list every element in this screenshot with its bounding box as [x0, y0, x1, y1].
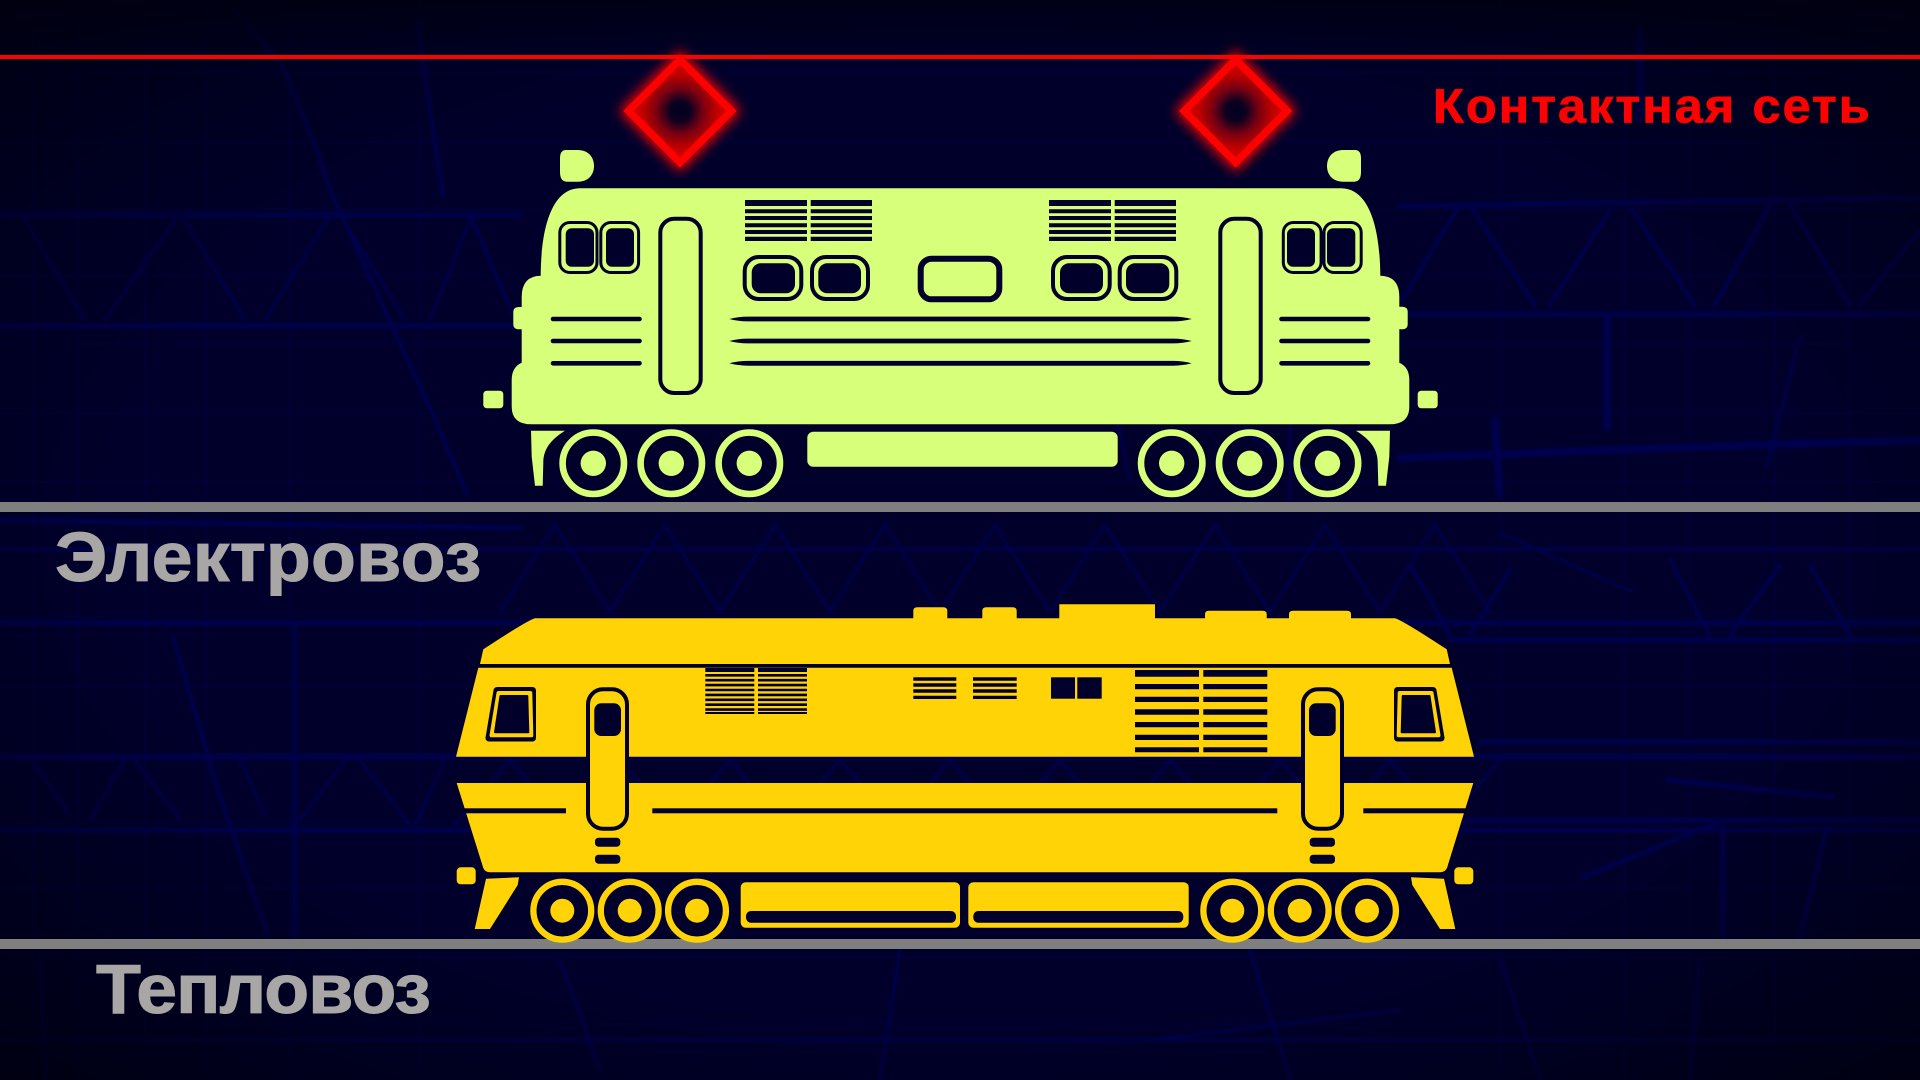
- diesel loco: left buffer: [457, 867, 476, 884]
- electric loco: right roof pad: [1327, 150, 1361, 182]
- electric loco: left vent: [745, 200, 872, 241]
- electric locomotive: [483, 150, 1438, 494]
- label: contact network: Контактная сеть: [1433, 80, 1870, 133]
- electric loco: underframe tank: [807, 432, 1118, 467]
- electric loco: doors: [660, 219, 1261, 393]
- electric loco: left buffer: [483, 391, 503, 408]
- electric loco: long side grilles: [729, 317, 1192, 366]
- diesel loco: left skirt: [475, 877, 519, 929]
- diesel loco: middle body: [456, 668, 1474, 757]
- rail under diesel locomotive: [0, 939, 1920, 949]
- diesel loco: right cab window: [1398, 690, 1441, 738]
- diesel loco: roof and upper body: [480, 604, 1450, 664]
- diesel loco: side trim lines: [460, 808, 1469, 813]
- electric loco: side windows: [745, 257, 1176, 299]
- overhead contact wire glow and pantograph diamonds: [629, 60, 1287, 162]
- diesel loco: large radiator vent: [1135, 670, 1267, 752]
- label: electric locomotive: Электровоз: [55, 519, 481, 597]
- diesel loco: doors: [588, 689, 1342, 829]
- label: diesel locomotive: Тепловоз: [96, 951, 431, 1029]
- electric loco: left roof pad: [560, 150, 594, 182]
- electric loco: left cab windows: [560, 222, 639, 272]
- diesel loco: left cab window: [489, 690, 532, 738]
- diesel loco: small vents: [913, 677, 1017, 699]
- electric loco: right cab windows: [1283, 222, 1361, 272]
- pantograph: right diamond: [1184, 60, 1287, 162]
- diesel loco: right skirt: [1411, 877, 1455, 929]
- rail under electric locomotive: [0, 502, 1920, 512]
- diesel locomotive: [456, 604, 1474, 940]
- electric loco: right vent: [1049, 200, 1176, 241]
- diesel loco: left wheels: [533, 882, 726, 940]
- contact wire: [0, 55, 1920, 59]
- diesel loco: left fuel tank: [741, 882, 960, 928]
- diesel loco: dark square hatches: [1051, 677, 1102, 699]
- diesel loco: right fuel tank: [968, 882, 1189, 928]
- diesel loco: lower body: [457, 783, 1473, 872]
- electric loco: short side grilles: [553, 319, 1368, 363]
- electric loco: centre hatch: [921, 259, 999, 299]
- diesel loco: right buffer: [1454, 867, 1473, 884]
- diesel loco: right wheels: [1203, 882, 1396, 940]
- pantograph: left diamond: [629, 60, 731, 162]
- electric loco: left wheels: [563, 433, 780, 494]
- electric loco: right wheels: [1141, 433, 1358, 494]
- diesel loco: door step slots: [595, 838, 1335, 864]
- electric loco: left skirt: [531, 431, 565, 486]
- electric loco: right buffer: [1418, 391, 1438, 408]
- electric loco: right skirt: [1356, 431, 1390, 486]
- diesel loco: louvre vent left: [705, 668, 807, 714]
- electric loco: body: [512, 188, 1409, 424]
